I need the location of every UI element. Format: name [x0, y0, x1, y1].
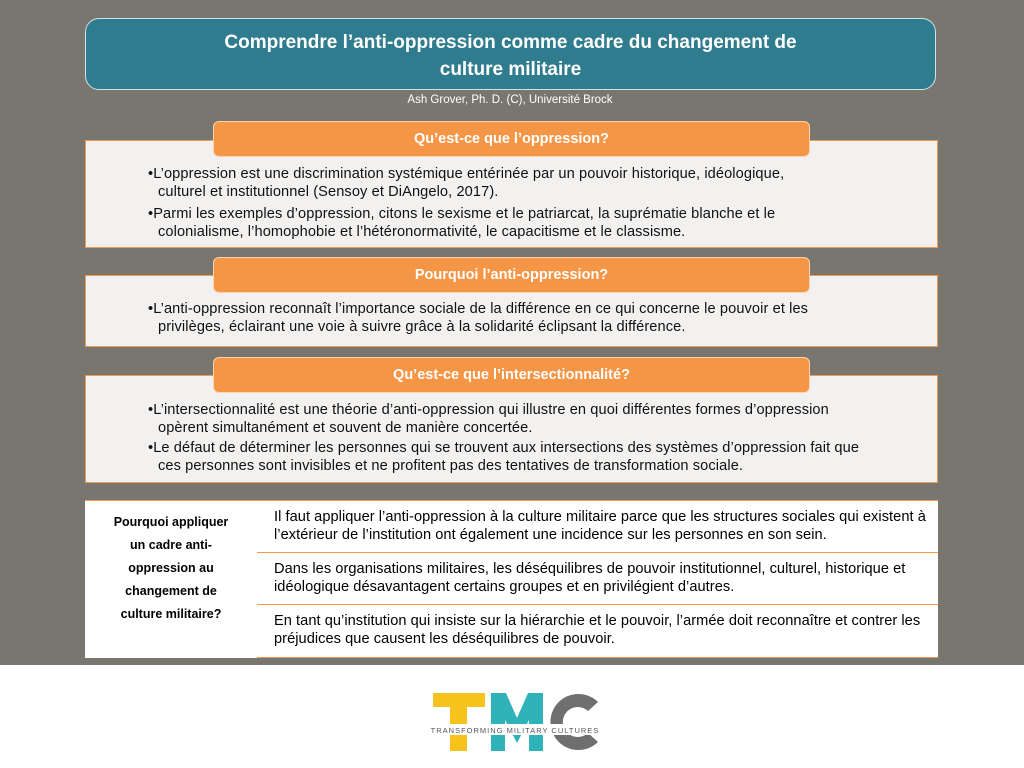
logo: TMC: TRANSFORMING MILITARY CULTURES — [431, 726, 599, 735]
panel: intersectionnalite — [85, 375, 938, 483]
author: Ash Grover, Ph. D. (C), Université Brock — [407, 94, 613, 106]
heading: intersectionnalite — [213, 357, 810, 393]
panel: pourquoi anti-oppression — [85, 275, 938, 347]
panel: intersectionnalite: opèrent simultanément et souvent de manière concertée. — [158, 420, 533, 436]
panel: intersectionnalite: •L’intersectionnalité est une théorie d’anti-oppression qui illustre en quoi différentes formes d’oppression — [148, 402, 829, 418]
heading: intersectionnalite: Qu’est-ce que l’intersectionnalité? — [393, 367, 630, 383]
left question: culture militaire? — [121, 607, 221, 621]
panel: oppression: •Parmi les exemples d’oppression, citons le sexisme et le patriarcat, la suprématie blanche et le — [148, 206, 775, 222]
left question: Pourquoi appliquer — [114, 515, 228, 529]
panel: oppression: •L’oppression est une discrimination systémique entérinée par un pouvoir historique, idéologique, — [148, 166, 784, 182]
panel: oppression: culturel et institutionnel (Sensoy et DiAngelo, 2017). — [158, 184, 498, 200]
left question: un cadre anti- — [130, 538, 212, 552]
title: Comprendre l’anti-oppression comme cadre du changement de — [224, 32, 797, 53]
row 2 — [257, 553, 938, 605]
panel: oppression: colonialisme, l’homophobie et l’hétéronormativité, le capacitisme et le classisme. — [158, 224, 685, 240]
row 1: l’extérieur de l’institution ont également une incidence sur les personnes en son sein. — [274, 527, 827, 543]
panel: intersectionnalite: ces personnes sont invisibles et ne profitent pas des tentatives de transformation sociale. — [158, 458, 743, 474]
heading: pourquoi — [213, 257, 810, 293]
heading: pourquoi: Pourquoi l’anti-oppression? — [415, 267, 608, 283]
panel: intersectionnalite: •Le défaut de déterminer les personnes qui se trouvent aux intersections des systèmes d’oppression fait que — [148, 440, 859, 456]
panel: pourquoi anti-oppression: privilèges, éclairant une voie à suivre grâce à la solidarité éclipsant la différence. — [158, 319, 686, 335]
title: culture militaire — [440, 59, 581, 80]
heading: oppression: Qu’est-ce que l’oppression? — [414, 131, 609, 147]
heading: oppression — [213, 121, 810, 157]
row 3: En tant qu’institution qui insiste sur la hiérarchie et le pouvoir, l’armée doit reconnaître et contrer les — [274, 613, 920, 629]
row 2: idéologique désavantagent certains groupes et en privilégient d’autres. — [274, 579, 734, 595]
left question: changement de — [125, 584, 217, 598]
left question — [114, 515, 228, 621]
row 3 — [257, 605, 938, 658]
table: pourquoi appliquer — [85, 500, 938, 658]
logo: TMC — [430, 693, 599, 751]
row 1 — [257, 501, 938, 553]
title — [85, 18, 936, 90]
panel: pourquoi anti-oppression: •L’anti-oppression reconnaît l’importance sociale de la différence en ce qui concerne le pouvoir et les — [148, 301, 808, 317]
left question: oppression au — [128, 561, 214, 575]
row 3: préjudices que causent les déséquilibres de pouvoir. — [274, 631, 615, 647]
panel: oppression — [85, 140, 938, 248]
row 2: Dans les organisations militaires, les déséquilibres de pouvoir institutionnel, culturel, historique et — [274, 561, 905, 577]
row 1: Il faut appliquer l’anti-oppression à la culture militaire parce que les structures sociales qui existent à — [274, 509, 926, 525]
